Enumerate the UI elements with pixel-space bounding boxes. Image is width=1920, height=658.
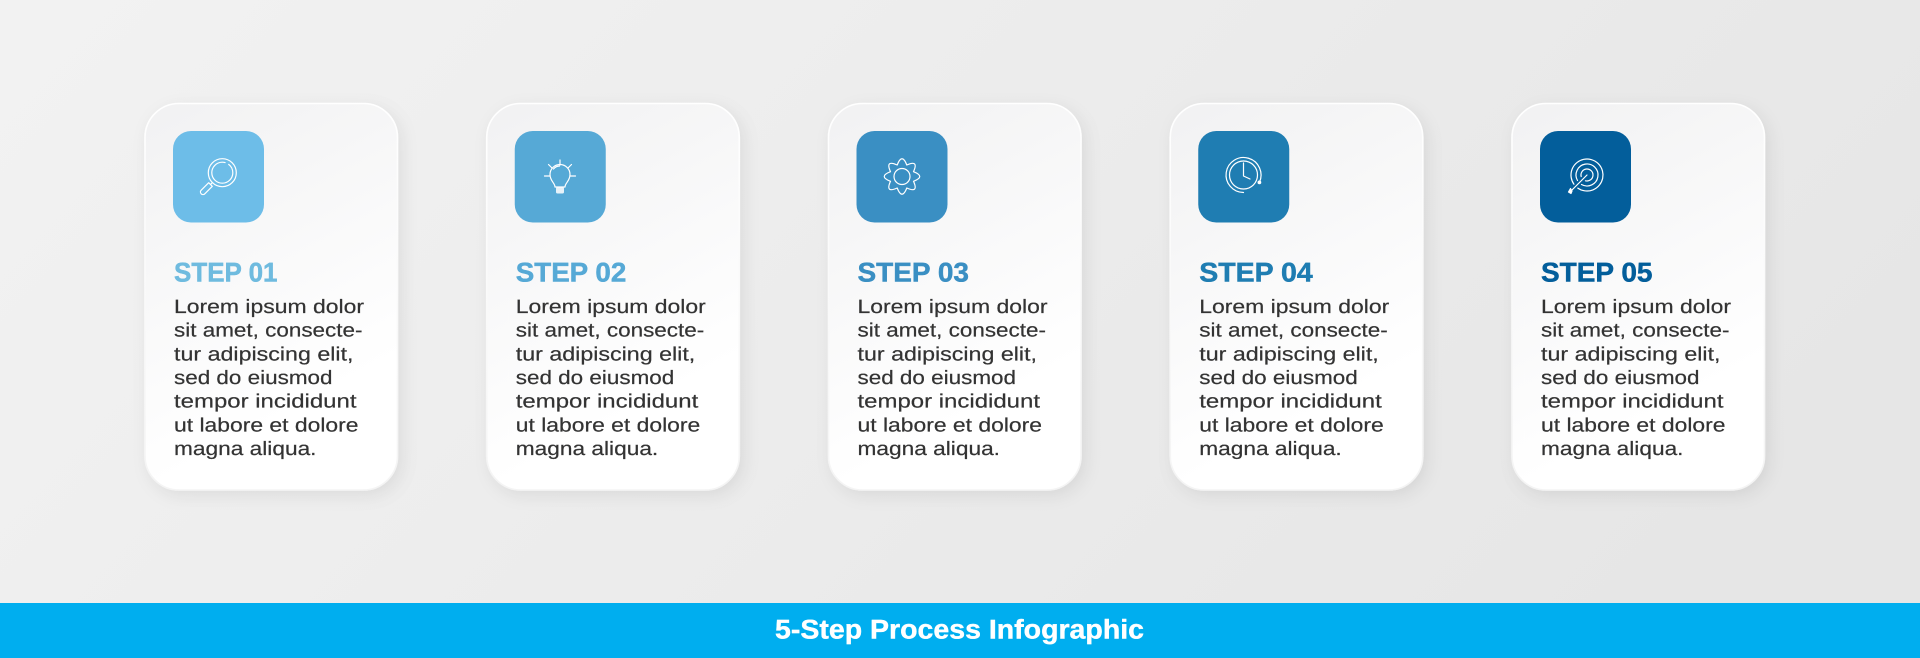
text block 02: tur adipiscing elit, [516, 344, 695, 365]
icon tile 04 [1198, 131, 1289, 222]
text block 01: tur adipiscing elit, [174, 344, 354, 365]
text block 03: tur adipiscing elit, [858, 344, 1037, 365]
icon: target with arrow [1568, 159, 1603, 194]
text block 03: Lorem ipsum dolor [858, 297, 1048, 318]
text block 02: ut labore et dolore [516, 415, 700, 436]
heading: step 01: STEP 01 [174, 258, 278, 288]
text block 04: magna aliqua. [1199, 439, 1342, 460]
text block 04: ut labore et dolore [1199, 415, 1384, 436]
text block 04: Lorem ipsum dolor [1199, 297, 1390, 318]
icon: magnifier [200, 159, 236, 195]
icon tile 05 [1540, 131, 1631, 222]
icon tile 02 [515, 131, 606, 222]
text block 01 [174, 297, 365, 460]
text block 05: ut labore et dolore [1541, 415, 1726, 436]
heading: step 02: STEP 02 [516, 258, 626, 288]
panel: step 04 [1170, 104, 1423, 490]
text block 04: sed do eiusmod [1199, 368, 1358, 389]
icon tile 03 [856, 131, 948, 222]
text block 02: tempor incididunt [516, 392, 699, 413]
text block 02 [516, 297, 706, 460]
text block 01: Lorem ipsum dolor [174, 297, 365, 318]
panel: step 02 [487, 104, 739, 490]
text block 03: tempor incididunt [858, 392, 1041, 413]
heading: step 05: STEP 05 [1541, 258, 1652, 288]
heading: step 04: STEP 04 [1199, 258, 1313, 288]
icon: light bulb [544, 160, 576, 194]
text block 03: magna aliqua. [858, 439, 1000, 460]
panel: step 05 [1512, 104, 1764, 490]
text block 05: magna aliqua. [1541, 439, 1684, 460]
text block 01: sed do eiusmod [174, 368, 332, 389]
text block 05: tempor incididunt [1541, 392, 1724, 413]
card 01 [145, 104, 398, 490]
card 05 [1512, 104, 1764, 490]
text block 04 [1199, 297, 1390, 460]
text block 05 [1541, 297, 1732, 460]
title: 5-Step Process Infographic [775, 614, 1144, 644]
text block 03: ut labore et dolore [858, 415, 1042, 436]
card 03 [828, 104, 1081, 490]
heading: step 03: STEP 03 [858, 258, 969, 288]
icon: gear [884, 159, 920, 194]
text block 03: sit amet, consecte- [858, 321, 1046, 342]
text block 05: tur adipiscing elit, [1541, 344, 1720, 365]
text block 04: sit amet, consecte- [1199, 321, 1388, 342]
text block 03 [858, 297, 1048, 460]
text block 02: sit amet, consecte- [516, 321, 704, 342]
text block 01: tempor incididunt [174, 392, 357, 413]
icon tile 01 [173, 131, 264, 222]
icon: clock [1226, 158, 1261, 192]
text block 01: magna aliqua. [174, 439, 316, 460]
text block 05: sit amet, consecte- [1541, 321, 1730, 342]
card 04 [1170, 104, 1423, 490]
text block 05: Lorem ipsum dolor [1541, 297, 1732, 318]
text block 02: sed do eiusmod [516, 368, 674, 389]
text block 02: Lorem ipsum dolor [516, 297, 706, 318]
text block 02: magna aliqua. [516, 439, 658, 460]
text block 04: tempor incididunt [1199, 392, 1383, 413]
text block 01: sit amet, consecte- [174, 321, 362, 342]
text block 03: sed do eiusmod [858, 368, 1016, 389]
text block 05: sed do eiusmod [1541, 368, 1700, 389]
text block 04: tur adipiscing elit, [1199, 344, 1379, 365]
panel: step 03 [828, 104, 1081, 490]
text block 01: ut labore et dolore [174, 415, 358, 436]
panel: step 01 [145, 104, 398, 490]
card 02 [487, 104, 739, 490]
footer bar [0, 603, 1920, 658]
